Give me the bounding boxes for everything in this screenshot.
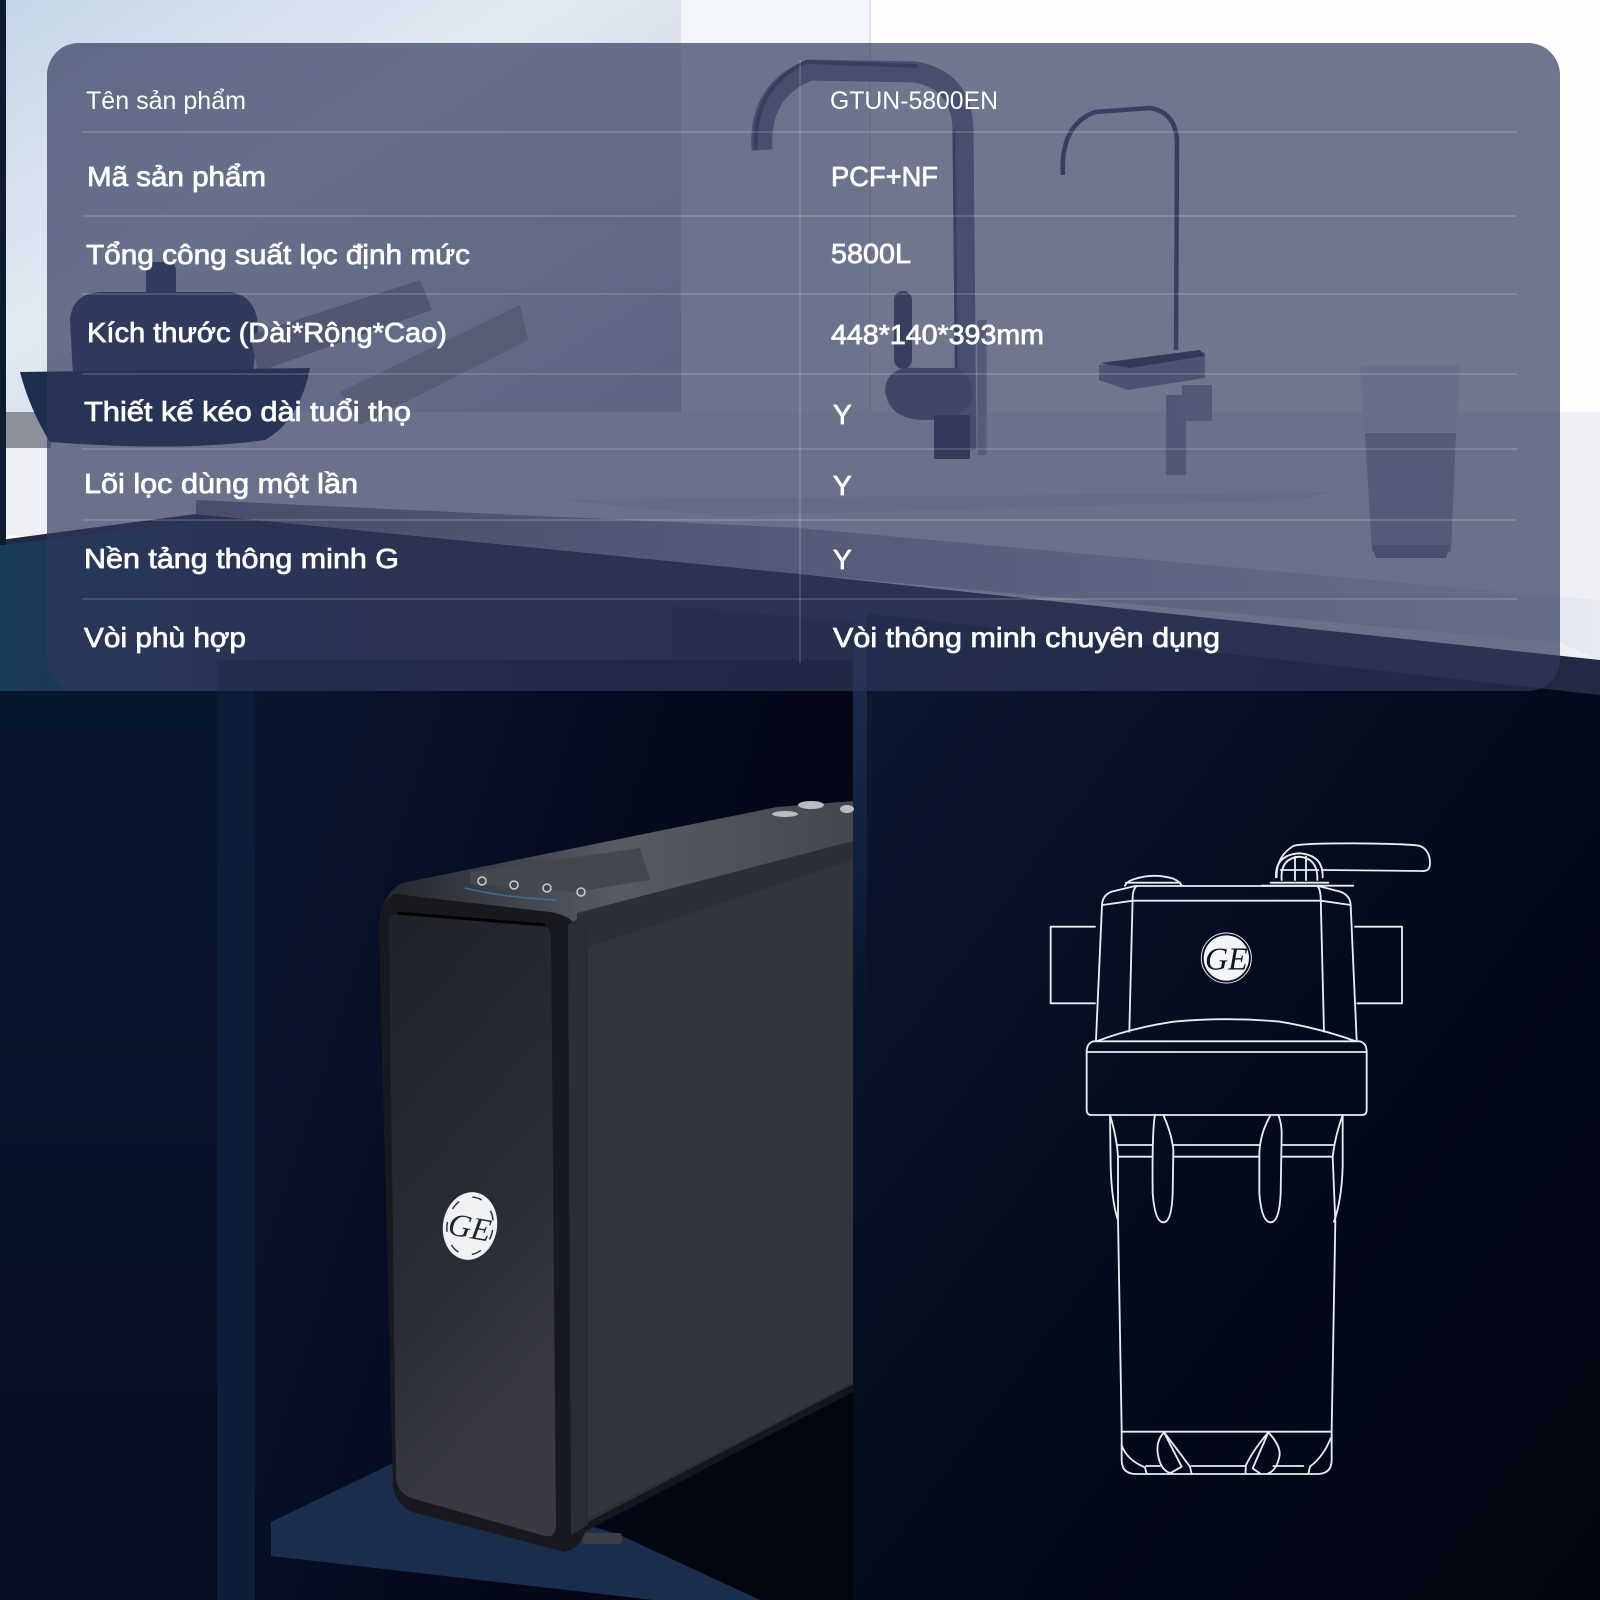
row: compatible faucet: Vòi phù hợp bbox=[84, 622, 246, 653]
kitchen background bbox=[0, 0, 1600, 720]
row: product code bbox=[87, 161, 938, 192]
row: compatible faucet bbox=[84, 622, 1220, 653]
logo on product: GE bbox=[446, 1206, 494, 1248]
lower canister bbox=[1110, 1115, 1343, 1474]
lower cabinet bbox=[0, 612, 1600, 1600]
row: product name: GTUN-5800EN bbox=[830, 87, 998, 115]
row: long life design: Y bbox=[833, 399, 852, 430]
row: rated capacity: 5800L bbox=[831, 238, 911, 269]
top buttons bbox=[772, 801, 854, 817]
sink bowl bbox=[672, 606, 853, 720]
row: long life design: Thiết kế kéo dài tuổi thọ bbox=[84, 396, 411, 427]
row: smart platform: Y bbox=[833, 544, 852, 575]
row: disposable filter bbox=[84, 468, 852, 501]
pot bbox=[70, 262, 528, 425]
upper assembly bbox=[1051, 843, 1430, 1115]
foot bbox=[582, 1533, 622, 1544]
shelf bbox=[271, 1464, 760, 1600]
row: disposable filter: Lõi lọc dùng một lần bbox=[84, 468, 358, 499]
side panel bbox=[577, 841, 853, 1530]
line drawing of filter bbox=[1051, 843, 1430, 1474]
row dividers bbox=[82, 60, 1517, 663]
row: dimensions: Kích thước (Dài*Rộng*Cao) bbox=[87, 317, 447, 348]
row: rated capacity: Tổng công suất lọc định mức bbox=[86, 239, 470, 270]
row: dimensions: 448*140*393mm bbox=[831, 319, 1044, 350]
logo on drawing: GE bbox=[1205, 940, 1248, 976]
row: smart platform: Nền tảng thông minh G bbox=[84, 543, 399, 574]
water glass bbox=[1360, 366, 1460, 558]
faucet left bbox=[756, 62, 982, 459]
row: product name: Tên sản phẩm bbox=[86, 87, 246, 115]
logo on product bbox=[438, 1188, 502, 1264]
front panel bbox=[389, 913, 556, 1536]
row: rated capacity bbox=[86, 238, 911, 270]
logo on drawing bbox=[1201, 933, 1251, 983]
shell bbox=[379, 894, 586, 1552]
row: compatible faucet: Vòi thông minh chuyên dụng bbox=[833, 622, 1220, 653]
row: smart platform bbox=[84, 543, 852, 575]
specification table panel bbox=[47, 43, 1560, 691]
top surface bbox=[379, 801, 853, 930]
pan bbox=[20, 368, 310, 447]
row: product code: Mã sản phẩm bbox=[87, 161, 266, 192]
control icons bbox=[465, 877, 585, 900]
row: disposable filter: Y bbox=[833, 470, 852, 501]
water purifier product bbox=[379, 801, 854, 1552]
row: dimensions bbox=[87, 317, 1044, 350]
row: product name bbox=[86, 87, 998, 115]
row: long life design bbox=[84, 396, 852, 430]
faucet right bbox=[1063, 108, 1212, 475]
row: product code: PCF+NF bbox=[831, 161, 938, 192]
